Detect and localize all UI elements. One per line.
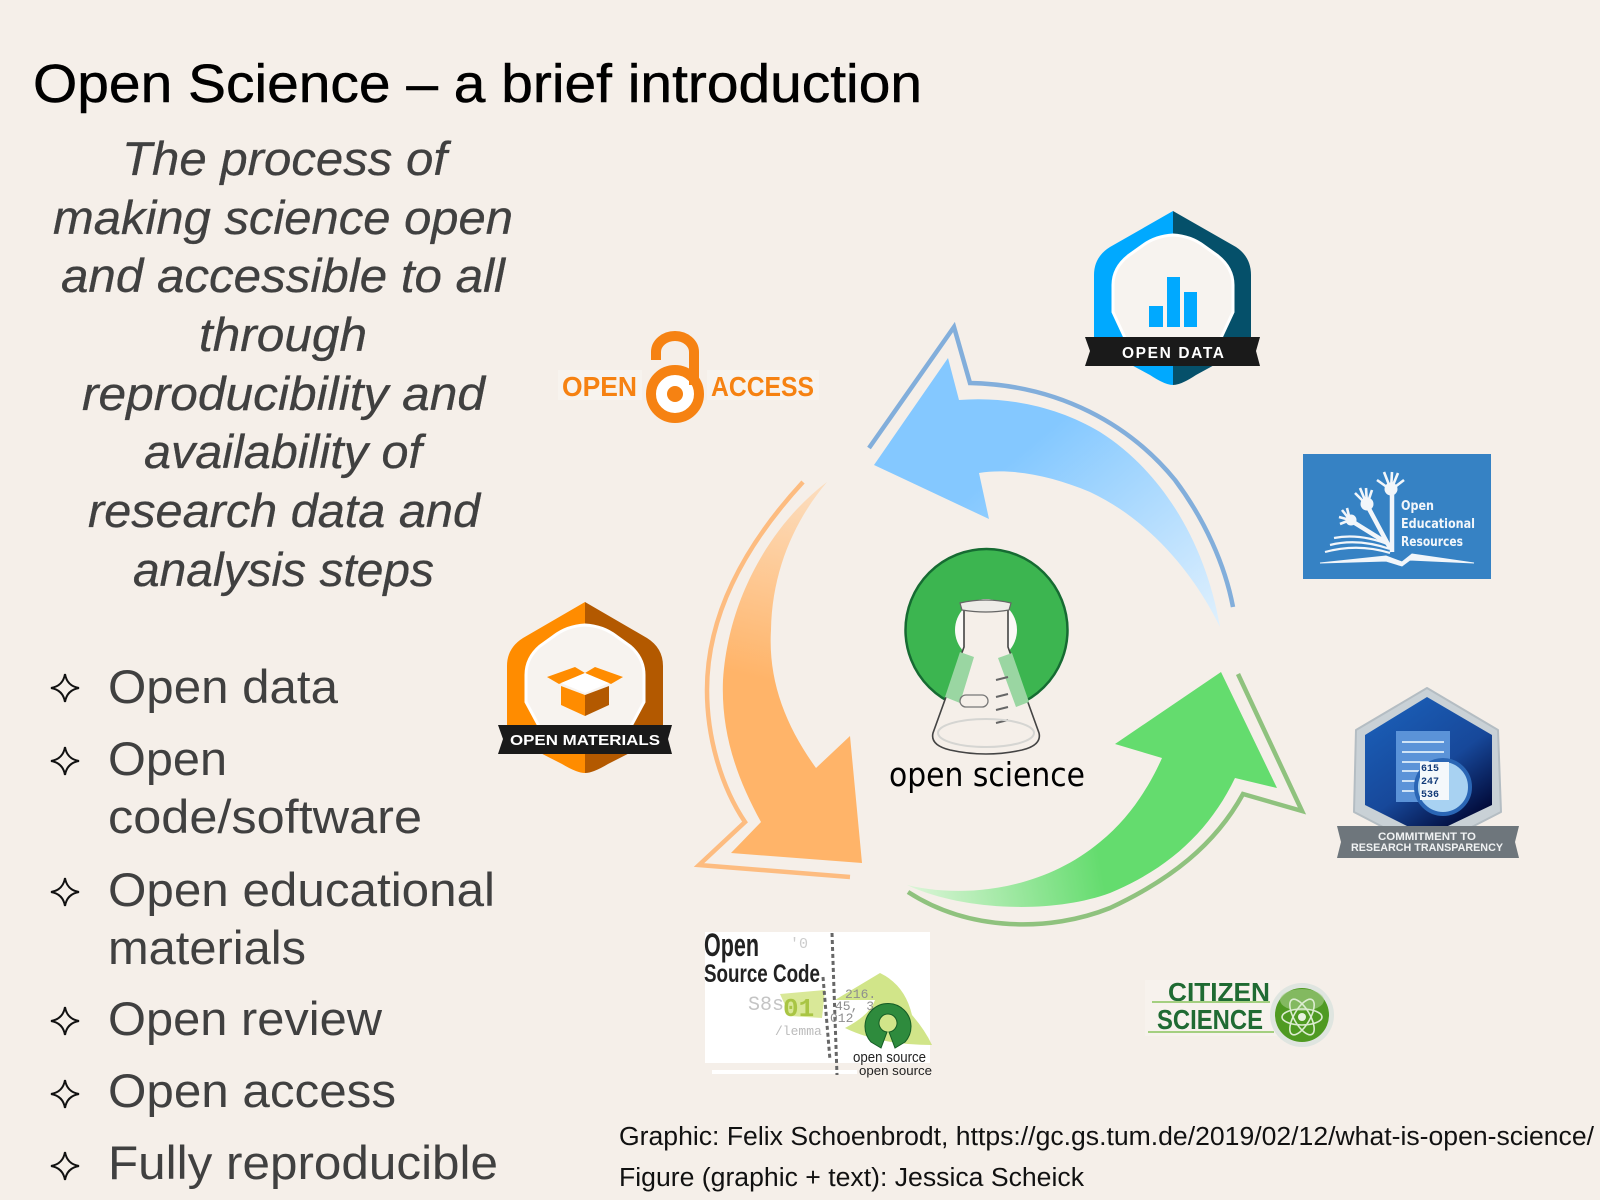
logo: open source code: 012 [830,1011,853,1026]
logo: open source code: 216. [845,987,876,1002]
title: Open Science – a brief introduction [33,54,922,114]
definition paragraph: The process of [122,133,452,186]
bullet: open code/software [51,733,422,844]
logo: open source code: S8s [748,994,784,1017]
logo: open educational resources [1303,454,1491,579]
bullet: fully reproducible: Fully reproducible [108,1137,498,1190]
definition paragraph: analysis steps [133,544,434,597]
logo: open source code: open source [859,1063,932,1078]
logo: open source code: 45, 3 [835,999,874,1014]
bullet: open educational materials: Open educational [108,864,495,917]
logo: open access: ACCESS [711,371,814,402]
badge: commitment to research transparency: 615 [1421,764,1439,775]
logo: open source code: Open [704,927,759,963]
badge: commitment to research transparency: 247 [1421,777,1439,788]
icon: open science flask logo [906,549,1068,754]
bullet: open code/software: Open [108,733,227,786]
logo: open source code: open source [853,1049,926,1066]
badge: open data [1085,211,1260,385]
arrow: green [907,672,1302,924]
definition paragraph [53,133,513,597]
logo: open access [558,336,819,418]
label: open science: open science [889,755,1085,794]
badge: open materials: OPEN MATERIALS [510,732,660,749]
arrow: orange [699,482,862,877]
bullet: open data: Open data [108,661,339,714]
credits [619,1123,1595,1192]
logo: citizen science: CITIZEN [1168,977,1270,1007]
badge: commitment to research transparency: RESEARCH TRANSPARENCY [1351,842,1504,854]
logo: citizen science [1145,977,1334,1047]
definition paragraph: through [199,309,367,362]
logo: open source code: '0 [790,936,808,953]
logo: open source code: /lemma [775,1024,822,1039]
badge: commitment to research transparency: COMMITMENT TO [1378,831,1476,843]
bullet: open educational materials [51,864,495,975]
bullet: open access: Open access [108,1065,396,1118]
arrow: blue [869,327,1233,627]
logo: open educational resources: Open [1401,499,1434,514]
badge: open materials [498,602,672,773]
logo: open source code [704,927,932,1078]
badge: open data: OPEN DATA [1122,345,1224,362]
definition paragraph: availability of [144,426,427,479]
badge: commitment to research transparency [1337,688,1519,858]
logo: open access: OPEN [562,371,637,402]
bullet list [51,661,498,1190]
bullet: open code/software: code/software [108,791,422,844]
definition paragraph: research data and [88,485,482,538]
bullet: open educational materials: materials [108,922,306,975]
definition paragraph: making science open [53,192,513,245]
bullet: open review: Open review [108,993,383,1046]
logo: open educational resources: Resources [1401,535,1463,550]
badge: commitment to research transparency: 536 [1421,790,1439,801]
logo: open source code: 01 [783,994,814,1024]
definition paragraph: reproducibility and [82,368,487,421]
definition paragraph: and accessible to all [61,250,506,303]
logo: citizen science: SCIENCE [1157,1004,1263,1035]
credits: Figure (graphic + text): Jessica Scheick [619,1164,1084,1192]
logo: open educational resources: Educational [1401,517,1475,532]
credits: Graphic: Felix Schoenbrodt, https://gc.gs.tum.de/2019/02/12/what-is-open-science/ [619,1123,1595,1151]
logo: open source code: Source Code [704,960,820,988]
